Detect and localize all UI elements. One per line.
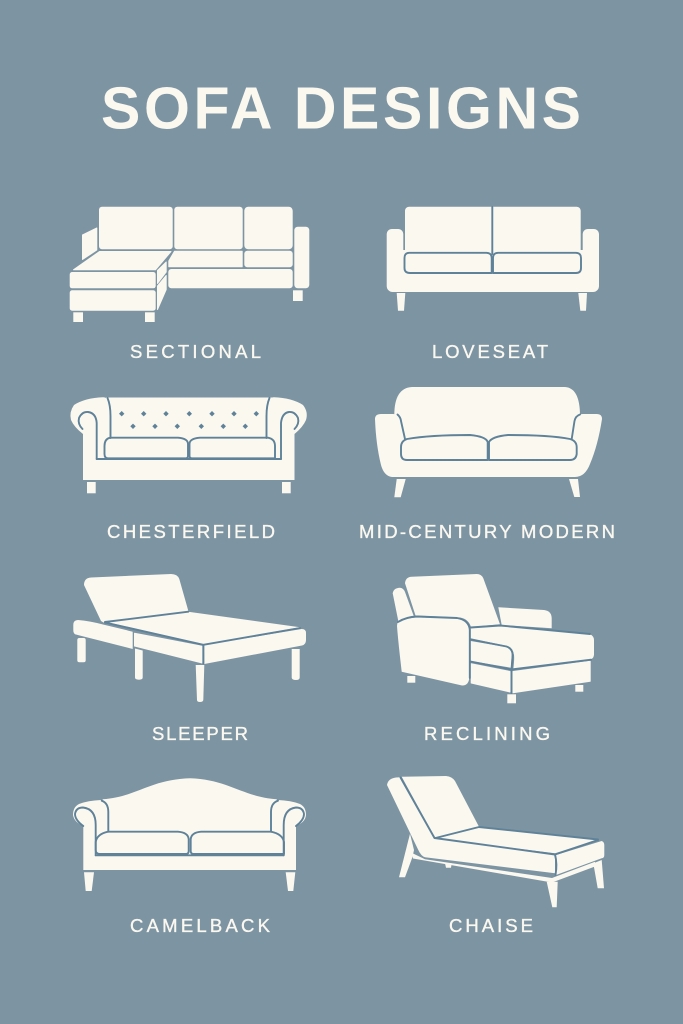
panel: chaise bbox=[387, 776, 604, 936]
label: chesterfield: CHESTERFIELD bbox=[107, 521, 275, 542]
icon: chesterfield sofa bbox=[70, 397, 307, 493]
label: mid-century modern: MID-CENTURY MODERN bbox=[359, 521, 615, 542]
title: SOFA DESIGNS bbox=[101, 76, 581, 142]
panel: sleeper bbox=[73, 574, 306, 744]
button tufts bbox=[119, 411, 259, 429]
panel: camelback bbox=[73, 778, 306, 936]
panel: chesterfield bbox=[70, 397, 307, 542]
label: sleeper: SLEEPER bbox=[152, 723, 248, 744]
label: loveseat: LOVESEAT bbox=[432, 341, 548, 362]
icon: mid-century modern sofa bbox=[375, 387, 602, 497]
label: reclining: RECLINING bbox=[424, 723, 550, 744]
icon: loveseat sofa bbox=[387, 207, 599, 311]
icon: chaise lounge bbox=[387, 776, 604, 907]
panel: mid-century modern bbox=[359, 387, 615, 542]
icon: camelback sofa bbox=[73, 778, 306, 891]
panel: loveseat bbox=[387, 207, 599, 362]
label: camelback: CAMELBACK bbox=[130, 915, 271, 936]
panel: sectional bbox=[70, 207, 309, 362]
label: sectional: SECTIONAL bbox=[130, 341, 261, 362]
label: chaise: CHAISE bbox=[449, 915, 533, 936]
icon: reclining sofa bbox=[393, 574, 594, 703]
panel: reclining bbox=[393, 574, 594, 744]
icon: sectional sofa bbox=[70, 207, 309, 322]
icon: sleeper sofa bbox=[73, 574, 306, 702]
